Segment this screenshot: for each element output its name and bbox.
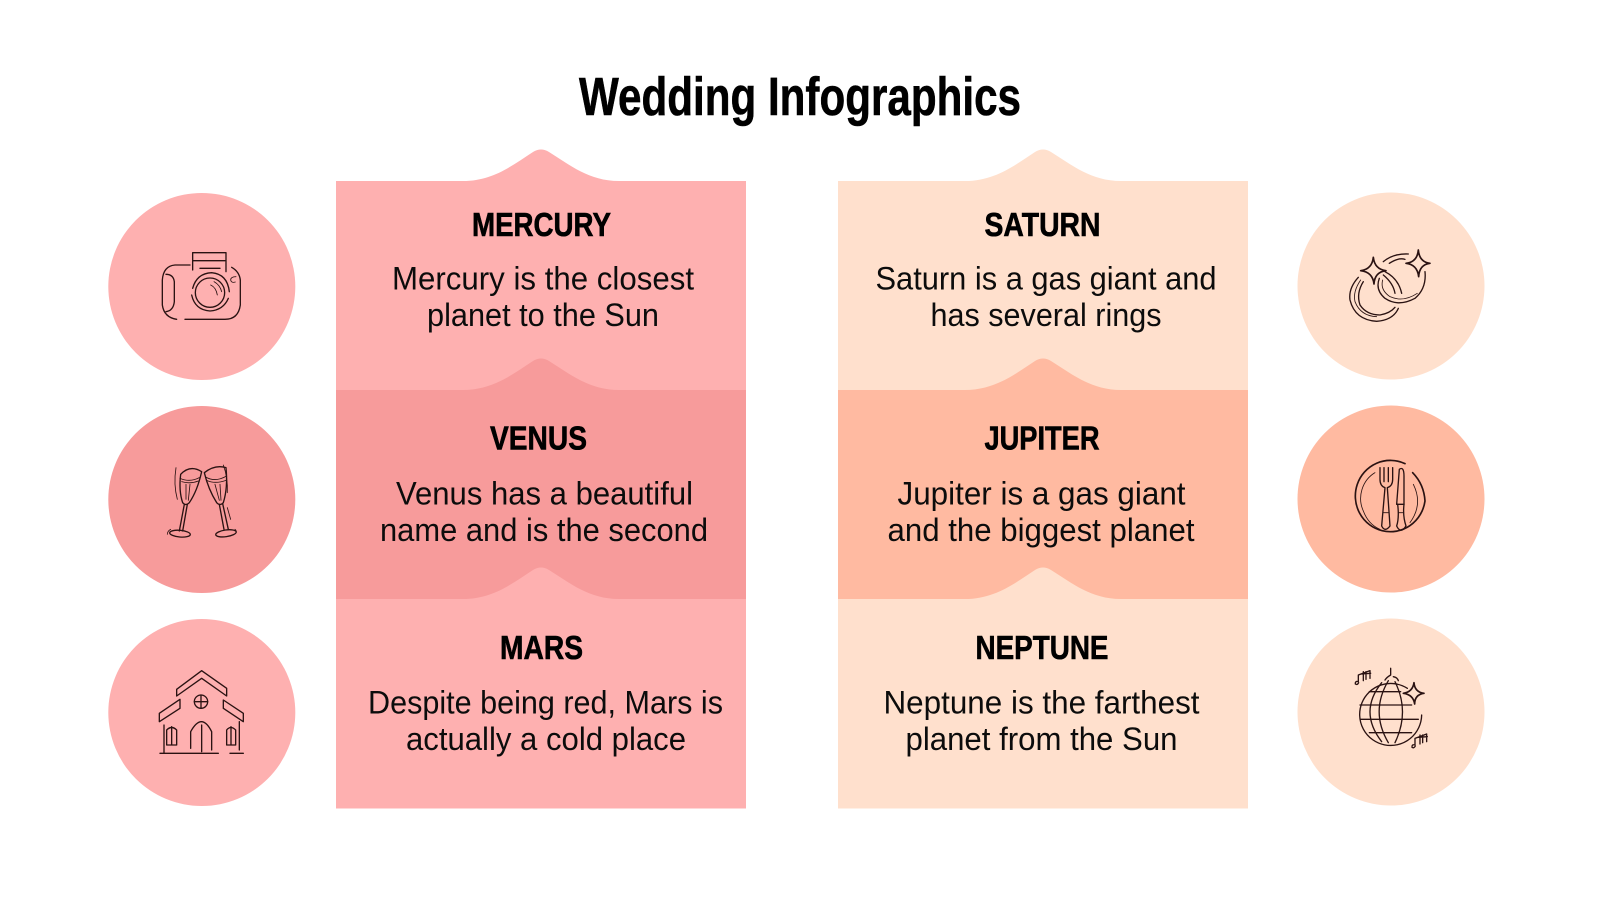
heading: mercury: MERCURY [472,206,611,243]
circle: plate [1298,406,1484,592]
text: neptune [884,684,1200,757]
text: mercury: planet to the Sun [427,297,659,333]
panel: neptune [838,568,1248,808]
text: venus [380,476,708,548]
text: mercury: Mercury is the closest [392,260,694,296]
panel shape: jupiter [838,358,1248,600]
text: mars: Despite being red, Mars is [368,684,723,720]
text: jupiter [888,476,1195,548]
text: mars: actually a cold place [406,721,686,757]
text: saturn [876,260,1216,333]
icon: champagne glasses [167,465,237,538]
text: saturn: has several rings [930,297,1162,333]
text: mars [368,684,723,757]
heading: saturn: SATURN [984,206,1100,243]
text: jupiter: and the biggest planet [888,512,1195,548]
panel shape: venus [336,358,746,600]
text: venus: Venus has a beautiful [396,476,693,512]
circle: rings [1298,192,1484,380]
heading: venus: VENUS [490,420,587,456]
icon: plate with cutlery [1355,460,1425,532]
title: Wedding Infographics [579,67,1021,127]
heading: jupiter: JUPITER [984,420,1100,456]
panel: mars [336,568,746,808]
circle: champagne [108,406,295,593]
heading: neptune: NEPTUNE [976,629,1108,666]
panel shape: neptune [838,568,1248,808]
icon: wedding rings [1350,250,1430,321]
icon: church [159,671,243,753]
panel: jupiter [838,358,1248,600]
icon: disco ball [1355,668,1427,748]
heading: mars: MARS [500,629,583,666]
circle: church [108,619,295,806]
circle: disco ball [1298,618,1484,806]
panel shape: saturn [838,150,1248,390]
panel: mercury [336,150,746,390]
panel: venus [336,358,746,600]
text: mercury [392,260,694,333]
text: venus: name and is the second [380,512,708,548]
panel shape: mercury [336,150,746,390]
panel: saturn [838,150,1248,390]
text: jupiter: Jupiter is a gas giant [898,476,1186,512]
text: saturn: Saturn is a gas giant and [876,260,1216,296]
circle: camera [108,193,295,380]
panel shape: mars [336,568,746,808]
text: neptune: Neptune is the farthest [884,684,1200,720]
text: neptune: planet from the Sun [906,721,1178,757]
icon: camera [162,253,240,319]
